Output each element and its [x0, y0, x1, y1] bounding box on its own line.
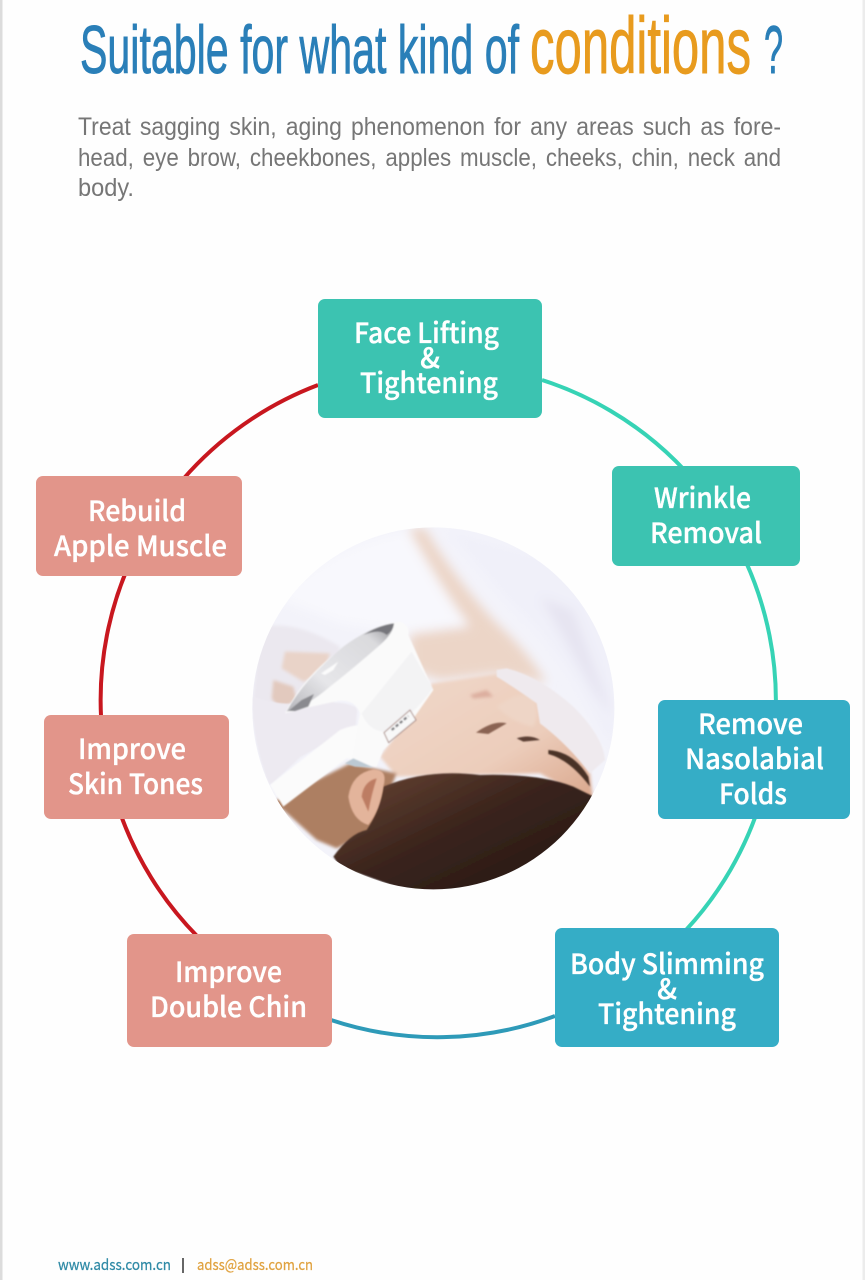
box: Face Lifting & Tightening: & — [420, 337, 440, 377]
box: Remove Nasolabial Folds: Nasolabial — [685, 738, 824, 778]
footer contact line: adss@adss.com.cn — [197, 1254, 313, 1275]
hair — [333, 773, 594, 900]
box: Face Lifting & Tightening: Face Lifting — [354, 312, 499, 352]
box: Rebuild Apple Muscle — [36, 476, 242, 576]
description text — [78, 113, 781, 202]
box: Body Slimming & Tightening: Body Slimming — [570, 943, 764, 983]
box: Improve Double Chin: Double Chin — [150, 986, 307, 1026]
box: Improve Double Chin: Improve — [175, 951, 282, 991]
central photo: treatment on face — [252, 528, 614, 890]
box: Face Lifting & Tightening — [318, 299, 542, 418]
description text: Treat sagging skin, aging phenomenon for any areas such as fore- — [78, 113, 781, 141]
left glove and fingers — [253, 625, 357, 785]
device handle and head — [270, 622, 433, 807]
box: Wrinkle Removal: Removal — [650, 512, 762, 552]
facial features — [476, 723, 540, 742]
box: Remove Nasolabial Folds — [658, 700, 850, 819]
right glove — [497, 668, 605, 773]
ear — [348, 769, 385, 825]
box: Face Lifting & Tightening: Tightening — [360, 362, 498, 402]
title: ? — [764, 12, 783, 88]
description text: head, eye brow, cheekbones, apples muscle, cheeks, chin, neck and — [78, 144, 781, 172]
box: Wrinkle Removal — [612, 466, 800, 566]
box: Improve Skin Tones: Skin Tones — [68, 763, 203, 803]
title: Suitable for what kind of — [80, 12, 519, 88]
footer contact line — [58, 1254, 313, 1275]
box: Improve Double Chin — [127, 934, 332, 1047]
box: Body Slimming & Tightening — [555, 928, 779, 1047]
box: Remove Nasolabial Folds: Remove — [698, 703, 803, 743]
footer contact line: www.adss.com.cn — [58, 1254, 171, 1275]
box: Improve Skin Tones: Improve — [78, 728, 186, 768]
box: Body Slimming & Tightening: & — [657, 968, 677, 1008]
box: Remove Nasolabial Folds: Folds — [719, 773, 787, 813]
ring connecting the conditions — [101, 380, 776, 1037]
box: Rebuild Apple Muscle: Rebuild — [88, 490, 186, 530]
box: Improve Skin Tones — [44, 715, 229, 819]
description text: body. — [78, 174, 134, 202]
box: Rebuild Apple Muscle: Apple Muscle — [54, 525, 227, 565]
box: Body Slimming & Tightening: Tightening — [598, 993, 736, 1033]
box: Wrinkle Removal: Wrinkle — [654, 477, 751, 517]
